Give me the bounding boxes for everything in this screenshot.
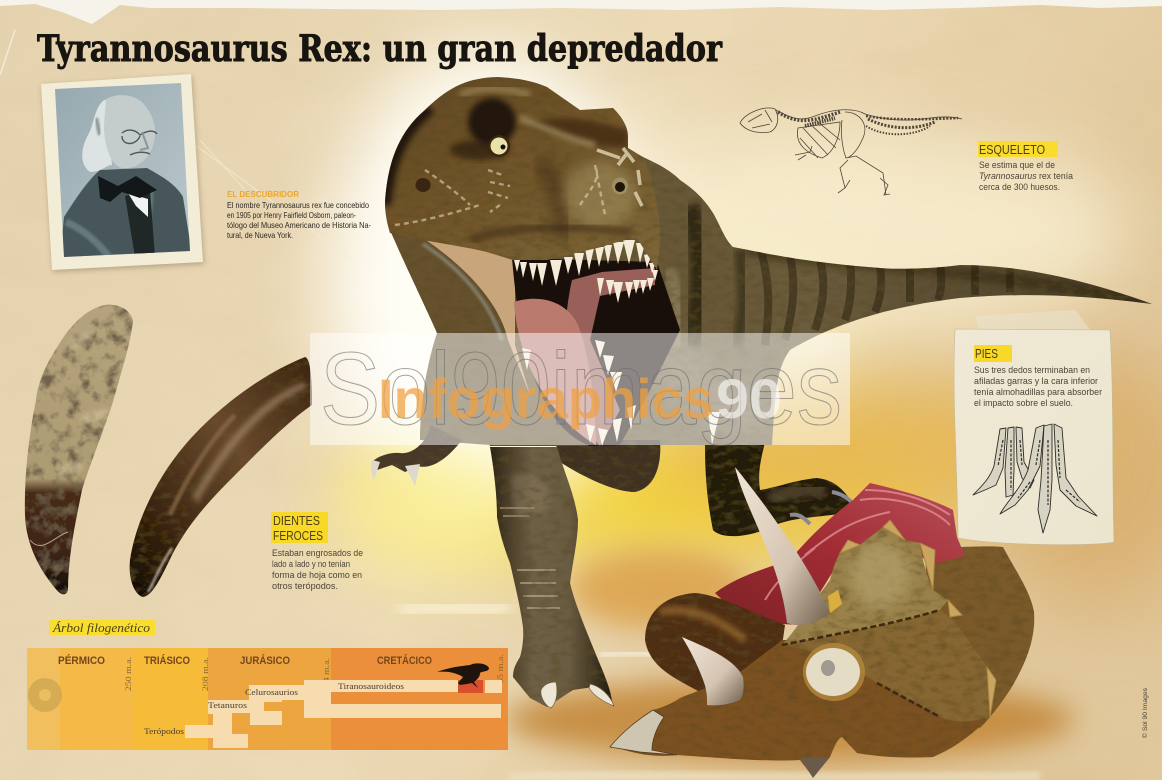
eye <box>488 135 510 157</box>
portrait of the discoverer <box>60 95 192 260</box>
emblem <box>28 678 62 712</box>
period labels: TRIÁSICO <box>144 654 190 667</box>
exposed flesh <box>715 483 965 625</box>
period labels: JURÁSICO <box>240 654 290 667</box>
tail and torso <box>400 157 1152 445</box>
text block: el impacto sobre el suelo. <box>974 398 1073 408</box>
text block: esqueleto: cerca de 300 huesos. <box>979 182 1060 192</box>
credit: © Sol 90 Images <box>1141 687 1149 738</box>
near leg <box>490 447 612 707</box>
neck behind frill <box>925 546 1034 728</box>
card <box>954 329 1114 545</box>
eye <box>803 643 865 701</box>
lip band <box>423 238 530 395</box>
label: dientes feroces: DIENTES <box>273 513 320 528</box>
frill stitching <box>782 610 940 717</box>
frill highlight <box>850 543 910 607</box>
main horn <box>735 467 830 625</box>
watermark: Sol90images <box>320 331 842 446</box>
second eye <box>612 178 628 194</box>
text block: esqueleto: Tyrannosaurus rex tenía <box>979 171 1073 181</box>
nostril <box>416 178 430 192</box>
text block: dientes feroces: otros terópodos. <box>272 581 338 591</box>
tiranosauroideos end <box>458 680 483 693</box>
left arm <box>372 425 462 472</box>
period labels: PÉRMICO <box>58 654 105 667</box>
date labels: 250 m.a. <box>123 657 133 691</box>
timeline: phylogenetic tree <box>27 648 508 750</box>
label: pies <box>974 345 1012 362</box>
photo card <box>42 76 204 272</box>
text block: el descubridor: El nombre Tyrannosaurus rex fue concebido <box>227 201 370 210</box>
frill lower plate <box>782 610 991 722</box>
branch labels: Tetanuros <box>208 701 247 710</box>
text block: el descubridor: tural, de Nueva York. <box>227 231 293 240</box>
label: dientes feroces <box>271 512 328 543</box>
foot claws <box>541 682 614 708</box>
tongue <box>514 299 596 445</box>
torn paper edge <box>0 0 1162 24</box>
label: dientes feroces: FEROCES <box>273 528 323 543</box>
skull <box>612 640 990 777</box>
illustration: tyrannosaurus rex <box>371 77 1152 708</box>
far hand claw <box>708 412 720 445</box>
raised far leg <box>705 430 857 536</box>
geological periods <box>27 648 508 750</box>
brow ridge <box>525 118 628 148</box>
text block: dientes feroces <box>271 512 363 591</box>
watermark: 90 <box>716 367 782 430</box>
branch labels: Celurosaurios <box>245 688 298 697</box>
illustration: skeleton <box>740 108 962 195</box>
text block: dientes feroces: forma de hoja como en <box>272 570 362 580</box>
branch labels <box>144 682 404 736</box>
lower horn <box>800 757 830 778</box>
lower jaw and throat <box>390 230 600 446</box>
text block: tenía almohadillas para absorber <box>974 387 1102 397</box>
snout and cheek highlights <box>395 165 605 225</box>
label: pies: PIES <box>975 346 998 361</box>
dinosaur silhouette <box>437 663 489 688</box>
far foot claws <box>790 492 857 524</box>
text block: el descubridor <box>227 189 371 240</box>
open mouth <box>512 240 680 446</box>
beak <box>610 710 677 755</box>
arm claws <box>371 460 420 486</box>
title: Tyrannosaurus Rex: un gran depredador <box>37 28 723 70</box>
nose lobe <box>645 593 785 695</box>
watermark: Infographics <box>378 367 714 430</box>
text block: dientes feroces: lado a lado y no tenían <box>272 559 350 569</box>
mouth gum <box>564 268 655 446</box>
period labels: CRETÁCICO <box>377 654 432 667</box>
text block: el descubridor: EL DESCUBRIDOR <box>227 189 299 199</box>
illustration: triceratops head <box>610 467 1034 778</box>
text block: Sus tres dedos terminaban en <box>974 365 1090 375</box>
head <box>385 77 660 270</box>
date labels <box>123 654 505 692</box>
upper teeth <box>514 240 658 286</box>
heading: arbol filogenetico: Árbol filogenético <box>52 620 151 635</box>
illustration: fossil tooth 1 <box>25 305 133 594</box>
branch labels: Terópodos <box>144 727 184 736</box>
panel: portrait photo <box>41 74 204 272</box>
pale cheek <box>564 161 636 229</box>
text block: esqueleto: Se estima que el de <box>979 160 1055 170</box>
inner lower teeth <box>522 278 654 446</box>
illustration: fossil tooth 2 <box>130 357 312 597</box>
text block: afiladas garras y la cara inferior <box>974 376 1098 386</box>
panel: pies note card <box>954 310 1114 545</box>
text block: el descubridor: en 1905 por Henry Fairfield Osborn, paleon- <box>227 211 356 220</box>
date labels: 208 m.a. <box>200 657 210 691</box>
tape <box>975 310 1092 334</box>
text block: dientes feroces: Estaban engrosados de <box>272 548 363 558</box>
branch labels: Tiranosauroideos <box>338 682 404 691</box>
dark skull edge <box>385 108 430 205</box>
period labels <box>58 654 432 667</box>
text block: el descubridor: tólogo del Museo Americano de Historia Na- <box>227 221 371 230</box>
foot bones sketch <box>973 424 1097 533</box>
text block <box>974 365 1102 408</box>
nose horn <box>682 637 744 705</box>
frill upper plate <box>782 527 948 645</box>
date labels: 65 m.a. <box>495 654 505 684</box>
text block: esqueleto <box>978 141 1073 192</box>
eye socket <box>468 98 516 146</box>
date labels: 144 m.a. <box>321 658 331 692</box>
frill scallops <box>840 520 996 717</box>
label: esqueleto: ESQUELETO <box>979 142 1045 157</box>
belly and near thigh <box>555 440 660 492</box>
branching bars <box>185 680 501 748</box>
